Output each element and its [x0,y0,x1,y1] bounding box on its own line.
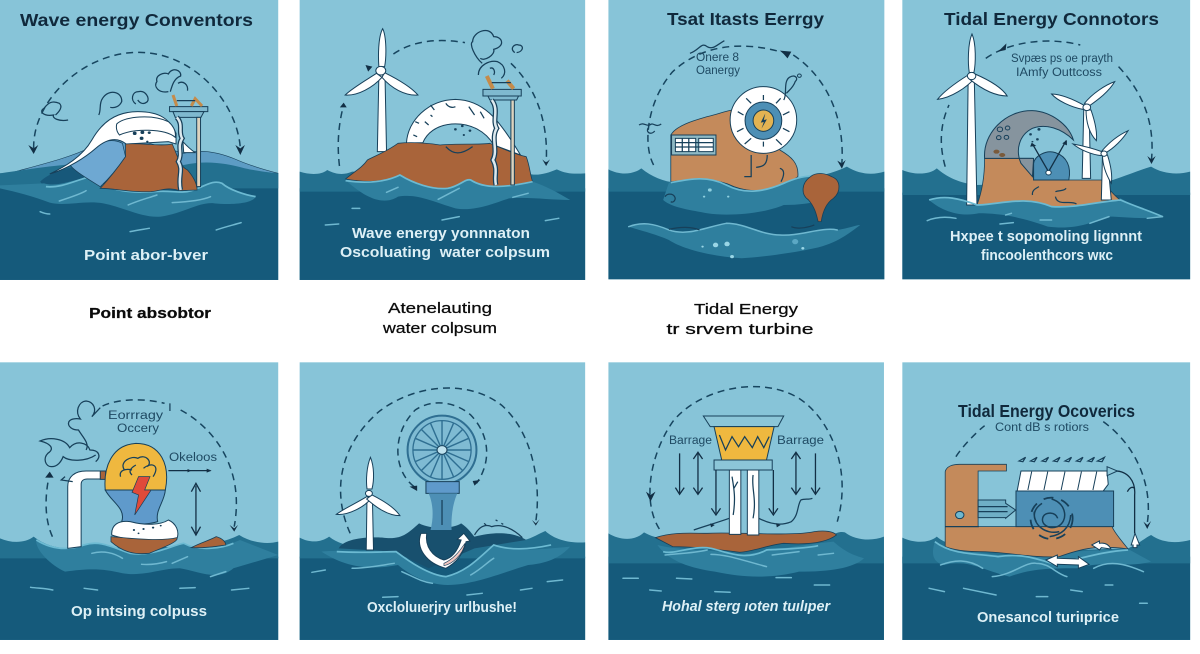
panel: barrage with air chamber: Occery [117,423,159,435]
panel: wave energy, oscillating water column: Wave energy yonnnaton [352,226,530,242]
panel: third top panel, generator building [608,0,884,279]
panel: wave energy, oscillating water column: Oscoluating water colpsum [340,245,550,261]
middle caption: attenuating water column: Atenelauting [388,300,492,317]
air chamber bulb [100,443,178,554]
grey crescent [985,111,1076,204]
upper sea [608,167,884,192]
panel: tidal energy converters, lagoon machine [902,362,1190,640]
wave band [0,177,256,232]
wave bands [629,176,860,258]
brown mound [346,143,533,189]
middle caption: point absorber: Point absobtor [89,305,211,322]
panel: tidal energy converters with turbines: Hxpee t sopomoling lignnnt [950,229,1142,245]
flow arrow into turbine [978,500,1016,518]
panel: wheel turbine above water [300,362,585,640]
white double arrow [1046,533,1140,568]
wave highlights [927,198,1163,224]
brown base [977,158,1120,207]
large wind turbine [938,34,1007,205]
wind turbine 3 [1073,131,1128,200]
dashed cycle arrows [341,388,540,533]
panel: tidal energy converters, lagoon machine: Onesancol turiıprice [977,610,1119,626]
breaking wave [50,112,195,187]
small rock [191,537,226,548]
panel: barrage tower: Barrage [669,435,712,447]
barrage tower [703,416,784,535]
panel: tidal energy converters with turbines [902,0,1190,279]
wave highlights [929,542,1147,603]
panel: tidal energy converters with turbines: IAmfy Outtcoss [1016,67,1102,79]
wind turbine [336,457,400,550]
turbine [345,29,418,152]
panel: barrage tower: Hohal sterg ıoten tuılıper [662,599,831,615]
upper sea [902,535,1190,563]
panel: barrage with air chamber: Op intsing colpuss [71,604,207,620]
brown mound [100,144,197,192]
brown island [655,531,837,552]
panel: wave energy converters, point absorber [0,0,278,280]
panel: wheel turbine above water: Oxcloluıerjry urlbushe! [367,600,517,616]
panel: barrage with air chamber: Eorrragy [108,410,163,422]
vertical arrows [675,452,820,530]
upper sea [300,169,585,192]
panel: third top panel, generator building: Onere 8 [696,52,739,64]
upper sea [608,532,884,563]
wave band [312,545,570,597]
brown tree-shaped rock [803,173,839,222]
smoke outline [40,401,100,482]
panel: wave energy, oscillating water column [300,0,585,280]
dashed arc [956,422,1151,529]
panel: tidal energy converters with turbines: Tidal Energy Connotors [944,9,1159,29]
steam clouds [471,30,522,78]
wave band [346,175,570,209]
middle caption: tidal energy: Tidal Energy [694,301,799,318]
generator building [671,110,798,191]
middle caption: stream turbine: tr srvem turbine [666,321,814,338]
dashed cycle arrows [941,41,1156,167]
white pipe [68,471,101,548]
white curved arrow [419,533,470,568]
wave band behind base [929,198,1163,228]
dashed cycle arrow [28,52,245,155]
side loop arrow [1107,467,1135,533]
upper sea [300,531,585,558]
wave band [933,542,1151,577]
panel: third top panel, generator building: Tsat Itasts Eerrgy [667,9,824,29]
panel: tidal energy converters with turbines: fincoolenthcors wкc [981,248,1113,264]
wave highlights [325,175,559,225]
panel: barrage tower [608,362,884,640]
dashed cycle arrows [338,41,550,166]
machine body [945,457,1128,557]
upper sea [0,535,278,558]
dashed arc [646,387,842,529]
wave band [657,542,864,577]
panel: barrage with air chamber [0,362,278,640]
arrows [45,400,238,537]
panel: wave energy converters, point absorber: Point abor-bver [84,248,208,264]
wave highlights [623,546,833,592]
absorber platform and tower [170,95,208,190]
wheel [408,416,476,530]
panel: third top panel, generator building: Oanergy [696,65,740,77]
dark mound [339,523,526,568]
spiral turbine [1031,498,1073,539]
panel: tidal energy converters, lagoon machine: Tidal Energy Ocoverics [958,401,1135,421]
panel: barrage with air chamber: Okeloos [169,452,217,464]
platform tower [483,76,521,185]
dashed cycle arrow [639,41,846,169]
panel: barrage tower: Barrage [777,435,824,447]
wave band [31,540,278,590]
panel: tidal energy converters, lagoon machine: Cont dB s rotiors [995,422,1089,434]
wind turbine 2 [1052,82,1115,178]
panel: tidal energy converters with turbines: Svpæs ps oe prayth [1011,53,1113,65]
white arch [406,99,520,155]
turbine wheel [730,74,801,153]
middle caption: water column second line: water colpsum [382,320,497,337]
steam clouds [42,70,188,120]
panel: wave energy converters, point absorber: Wave energy Conventors [20,10,253,30]
back swells [0,133,278,190]
upper sea [902,167,1190,195]
